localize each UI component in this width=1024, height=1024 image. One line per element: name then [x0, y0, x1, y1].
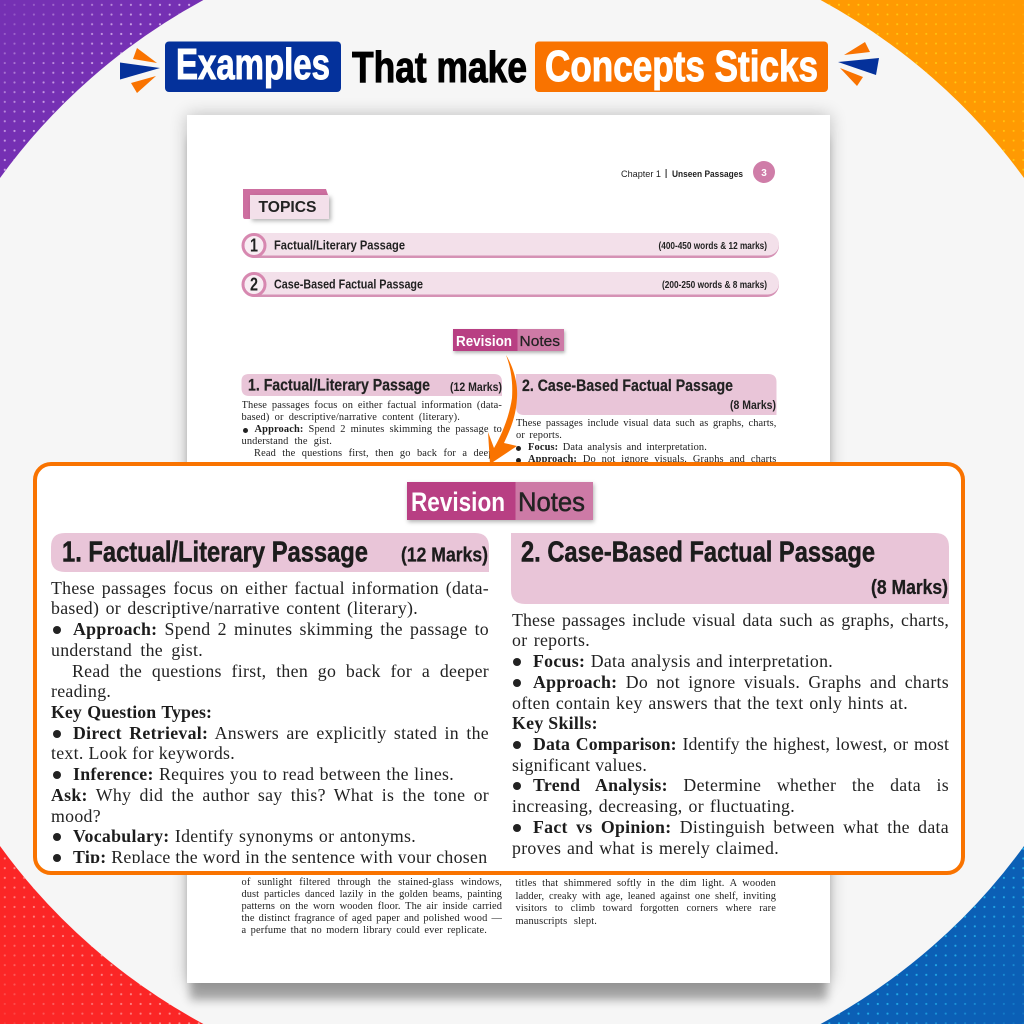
- topic 2 pill: [242, 272, 779, 297]
- callout text: left column: [51, 578, 489, 863]
- revision notes tag: Notes: [518, 487, 585, 517]
- callout text: right column: Data Comparison: Identify the highest, lowest, or most: [533, 734, 949, 754]
- callout text: right column: often contain key answers that the text only hints at.: [512, 692, 908, 712]
- topic 1 pill: 1: [250, 236, 258, 256]
- page text: left column bottom: dust particles danced lazily in the golden beams, painting: [242, 889, 502, 900]
- page text: right column top: These passages include visual data such as graphs, charts,: [516, 418, 776, 429]
- callout text: left column: Vocabulary: Identify synonyms or antonyms.: [73, 826, 416, 846]
- revision notes tag (page): Notes: [520, 333, 560, 350]
- callout text: right column: Fact vs Opinion: Distinguish between what the data: [533, 817, 949, 837]
- revision notes tag (page): [453, 329, 564, 351]
- page text: right column bottom: [516, 878, 776, 926]
- arrow: from page tag to zoomed callout: [488, 355, 518, 462]
- callout text: right column: or reports.: [512, 630, 590, 650]
- section heading 2: [511, 533, 949, 604]
- section heading 1: [51, 533, 489, 572]
- callout text: right column: Trend Analysis: Determine whether the data is: [533, 775, 949, 795]
- running header: Unseen Passages: [672, 169, 743, 180]
- callout text: left column: Ask: Why did the author say this? What is the tone or: [51, 785, 489, 805]
- page header and topic list: [242, 161, 779, 415]
- page text: left column top: Approach: Spend 2 minutes skimming the passage to: [254, 424, 502, 435]
- running header: Chapter 1: [621, 169, 661, 180]
- page text: right column bottom: ladder, creaky with age, leaned against one shelf, inviting: [516, 890, 776, 902]
- callout text: left column: Direct Retrieval: Answers are explicitly stated in the: [73, 723, 489, 743]
- page text: left column bottom: of sunlight filtered through the stained-glass windows,: [242, 877, 502, 888]
- callout text: right column: increasing, decreasing, or fluctuating.: [512, 796, 795, 816]
- section heading 1: 1. Factual/Literary Passage: [62, 537, 368, 569]
- section heading 2 (page): [516, 374, 776, 415]
- topic 2 pill: 2: [250, 274, 258, 294]
- running header: 3: [761, 168, 767, 179]
- page text: left column top: based) or descriptive/narrative content (literary).: [242, 412, 460, 423]
- revision notes tag: Revision: [411, 487, 505, 517]
- section heading 1 (page): 1. Factual/Literary Passage: [248, 377, 430, 395]
- page text: right column top: or reports.: [516, 430, 562, 441]
- callout text: right column: proves and what is merely claimed.: [512, 838, 779, 858]
- topic 2 pill: Case-Based Factual Passage: [274, 278, 423, 292]
- callout text: left column: Approach: Spend 2 minutes skimming the passage to: [73, 619, 489, 639]
- title word: Examples: Examples: [176, 40, 330, 89]
- callout text: right column: Focus: Data analysis and interpretation.: [533, 651, 833, 671]
- section heading 2: (8 Marks): [871, 577, 948, 599]
- section heading 2 (page): 2. Case-Based Factual Passage: [522, 377, 733, 395]
- page text: left column bottom: patterns on the worn wooden floor. The air inside carried: [242, 901, 502, 912]
- callout text: left column: mood?: [51, 806, 101, 826]
- page text: left column top: These passages focus on either factual information (data-: [242, 400, 502, 411]
- section heading 1: (12 Marks): [401, 544, 488, 566]
- callout text: left column: reading.: [51, 681, 111, 701]
- title words: That make: That make: [352, 43, 527, 92]
- section heading 2: 2. Case-Based Factual Passage: [521, 536, 875, 568]
- panel: book page: [187, 115, 830, 983]
- callout headings: [51, 482, 949, 604]
- running header: [621, 161, 775, 183]
- page text: left column top: understand the gist.: [242, 436, 332, 447]
- revision notes tag (page): Revision: [456, 333, 512, 350]
- callout: zoomed revision notes: [33, 462, 965, 875]
- page text: left column top: [242, 400, 502, 459]
- page text: right column bottom: visitors to climb toward forgotten corners where rare: [516, 903, 776, 914]
- topic 1 pill: Factual/Literary Passage: [274, 238, 405, 252]
- page text: right column bottom: titles that shimmered softly in the dim light. A wooden: [516, 878, 776, 889]
- page text: left column bottom: a perfume that no modern library could ever replicate.: [242, 925, 487, 936]
- callout text: right column: These passages include visual data such as graphs, charts,: [512, 610, 949, 630]
- callout text: left column: These passages focus on either factual information (data-: [51, 578, 489, 598]
- callout text: right column: Approach: Do not ignore visuals. Graphs and charts: [533, 672, 949, 692]
- callout text: left column: text. Look for keywords.: [51, 743, 235, 763]
- title words: Concepts Sticks: Concepts Sticks: [545, 42, 818, 91]
- icon: right burst: [838, 42, 879, 86]
- topic 1 pill: [242, 233, 779, 258]
- callout text: left column: Inference: Requires you to read between the lines.: [73, 764, 454, 784]
- title banner: [120, 40, 879, 93]
- topic 1 pill: (400-450 words & 12 marks): [658, 241, 767, 252]
- callout text: right column: [512, 610, 949, 858]
- callout text: right column: Key Skills:: [512, 713, 598, 733]
- callout text: left column: Read the questions first, then go back for a deeper: [72, 660, 489, 680]
- section heading 1 (page): (12 Marks): [450, 382, 502, 394]
- page text: right column bottom: manuscripts slept.: [516, 916, 597, 926]
- page text: left column top: Read the questions first, then go back for a deeper: [254, 448, 502, 459]
- page text: right column top: Focus: Data analysis and interpretation.: [528, 442, 707, 453]
- callout text: left column: understand the gist.: [51, 640, 203, 660]
- callout text: right column: significant values.: [512, 755, 647, 775]
- icon: left burst: [120, 48, 160, 93]
- revision notes tag: [407, 482, 593, 520]
- page text: right column top: [516, 418, 776, 462]
- page text: left column bottom: [242, 877, 502, 936]
- callout text: left column: based) or descriptive/narrative content (literary).: [51, 598, 418, 618]
- topic 2 pill: (200-250 words & 8 marks): [662, 280, 767, 291]
- section heading 2 (page): (8 Marks): [730, 400, 776, 412]
- topics heading: TOPICS: [258, 199, 317, 216]
- topics heading: [243, 189, 329, 219]
- page text: left column bottom: the distinct fragrance of aged paper and polished wood —: [242, 913, 502, 924]
- section heading 1 (page): [242, 374, 502, 396]
- callout text: left column: Key Question Types:: [51, 702, 212, 722]
